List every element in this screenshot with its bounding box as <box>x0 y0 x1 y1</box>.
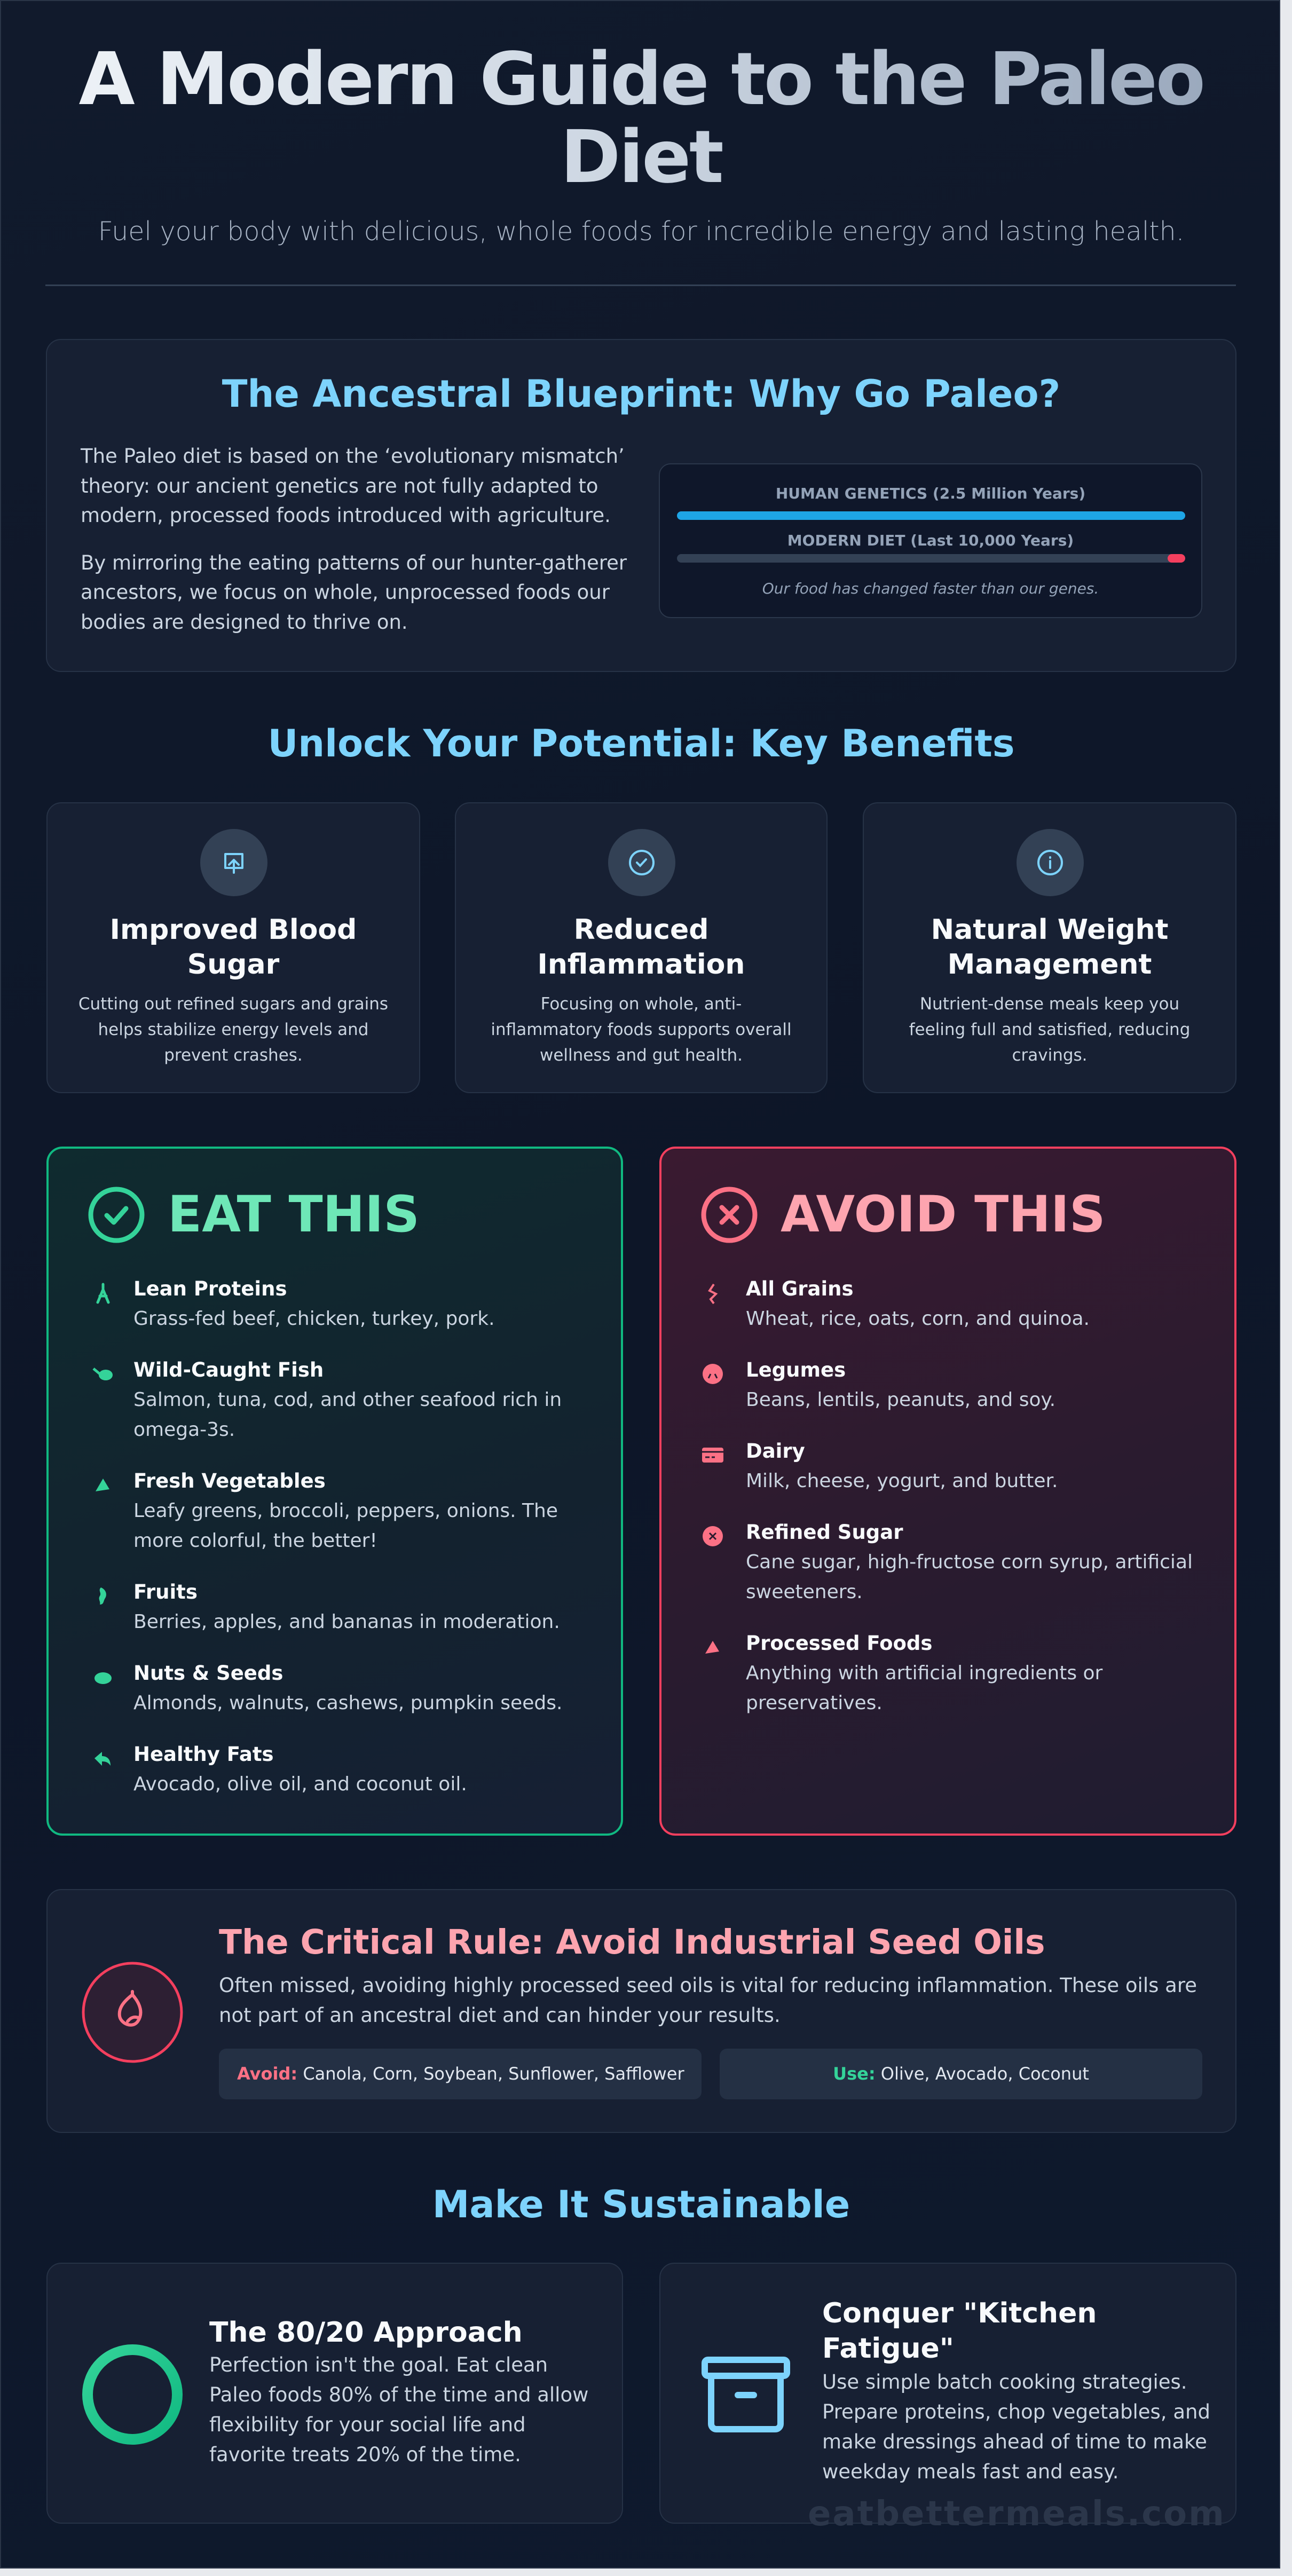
title: Diet <box>561 115 722 200</box>
chart: genetics vs diet timeline: HUMAN GENETICS (2.5 Million Years) <box>776 485 1085 502</box>
callout: use oils: Use: Olive, Avocado, Coconut <box>833 2064 1089 2084</box>
callout: avoid oils <box>219 2049 702 2099</box>
heading: seed oils: The Critical Rule: Avoid Industrial Seed Oils <box>219 1923 1045 1962</box>
text block: 80/20: Paleo foods 80% of the time and allow <box>209 2383 588 2406</box>
item: sugar <box>746 1521 1193 1603</box>
text block: mismatch theory: The Paleo diet is based on the ‘evolutionary mismatch’ <box>81 445 625 468</box>
text block: mismatch theory: theory: our ancient genetics are not fully adapted to <box>81 474 598 497</box>
text block: kitchen fatigue: weekday meals fast and easy. <box>822 2460 1119 2483</box>
panel: benefit weight: Nutrient-dense meals keep you <box>920 994 1179 1014</box>
item: processed: Processed Foods <box>746 1632 932 1655</box>
text block: mismatch theory: bodies are designed to thrive on. <box>81 611 408 633</box>
panel: benefit blood sugar: prevent crashes. <box>164 1046 303 1065</box>
item: lean proteins: Lean Proteins <box>133 1277 287 1300</box>
panel: benefit blood sugar: Cutting out refined sugars and grains <box>78 994 388 1014</box>
item: processed: Anything with artificial ingredients or <box>746 1662 1102 1684</box>
item: nuts: Almonds, walnuts, cashews, pumpkin seeds. <box>133 1692 562 1714</box>
text block: kitchen fatigue: Conquer "Kitchen <box>822 2297 1097 2329</box>
text block: 80/20: Perfection isn't the goal. Eat clean <box>209 2353 548 2376</box>
item: processed <box>746 1632 1103 1714</box>
heading: eat this: EAT THIS <box>168 1186 420 1244</box>
item: fruits: Berries, apples, and bananas in moderation. <box>133 1611 560 1633</box>
item: vegetables <box>133 1469 558 1552</box>
panel: benefit inflammation: Focusing on whole, anti- <box>541 994 742 1014</box>
item: fish <box>133 1358 562 1441</box>
item: vegetables: Leafy greens, broccoli, peppers, onions. The <box>133 1500 558 1522</box>
panel: benefit blood sugar <box>46 802 420 1093</box>
watermark: eatbettermeals.com <box>808 2494 1226 2534</box>
icon: check <box>608 829 675 896</box>
text block: kitchen fatigue: Fatigue" <box>822 2333 954 2365</box>
text block: kitchen fatigue: Prepare proteins, chop vegetables, and <box>822 2400 1210 2423</box>
heading: sustainable: Make It Sustainable <box>432 2183 850 2226</box>
text block: seed oils: not part of an ancestral diet and can hinder your results. <box>219 2004 781 2027</box>
item: lean proteins <box>133 1277 495 1330</box>
item: fish: Salmon, tuna, cod, and other seafood rich in <box>133 1389 562 1411</box>
text block: mismatch theory: modern, processed foods introduced with agriculture. <box>81 504 611 527</box>
icons: avoid list <box>702 1283 723 1654</box>
item: nuts: Nuts & Seeds <box>133 1662 283 1685</box>
panel: benefit inflammation <box>455 802 828 1093</box>
text block: seed oils <box>219 1974 1197 2027</box>
text block: mismatch theory: ancestors, we focus on whole, unprocessed foods our <box>81 581 610 604</box>
text block: 80/20 <box>209 2317 588 2466</box>
chart: genetics vs diet timeline: MODERN DIET (Last 10,000 Years) <box>787 532 1074 549</box>
title: A Modern Guide to the Paleo <box>79 37 1203 122</box>
title <box>1 41 1281 196</box>
heading: blueprint: The Ancestral Blueprint: Why Go Paleo? <box>222 372 1060 416</box>
item: vegetables: more colorful, the better! <box>133 1530 377 1552</box>
icon: info <box>1017 829 1084 896</box>
text block: mismatch theory: By mirroring the eating patterns of our hunter-gatherer <box>81 551 627 574</box>
icon: check circle <box>89 1187 144 1243</box>
panel: benefit blood sugar: Improved Blood <box>110 914 357 946</box>
item: dairy <box>746 1440 1058 1492</box>
callout: use oils <box>720 2049 1202 2099</box>
text block: 80/20: The 80/20 Approach <box>209 2317 523 2349</box>
icon: x circle <box>702 1187 757 1243</box>
text block: kitchen fatigue: Use simple batch cooking strategies. <box>822 2370 1187 2393</box>
chart: genetics vs diet timeline <box>659 463 1202 618</box>
text block: mismatch theory <box>80 445 627 633</box>
panel: 80/20 <box>46 2263 623 2524</box>
item: fruits <box>133 1581 560 1633</box>
item: lean proteins: Grass-fed beef, chicken, turkey, pork. <box>133 1308 495 1330</box>
panel: benefit weight <box>863 802 1236 1093</box>
item: fish: omega-3s. <box>133 1419 235 1441</box>
panel: benefit weight: feeling full and satisfied, reducing <box>909 1020 1190 1039</box>
text block: seed oils: Often missed, avoiding highly processed seed oils is vital for reducing inflammation. These oils are <box>219 1974 1197 1997</box>
panel: benefit inflammation: Reduced <box>574 914 708 946</box>
panel: benefit inflammation: inflammatory foods supports overall <box>491 1020 792 1039</box>
item: fats: Avocado, olive oil, and coconut oil. <box>133 1773 467 1795</box>
panel: benefit inflammation: wellness and gut health. <box>540 1046 743 1065</box>
heading: avoid this: AVOID THIS <box>781 1186 1106 1244</box>
bar: modern diet <box>677 554 1185 563</box>
subtitle: Fuel your body with delicious, whole foods for incredible energy and lasting health. <box>98 216 1184 247</box>
item: fats: Healthy Fats <box>133 1743 274 1766</box>
icon: seed oil <box>82 1962 183 2063</box>
panel: avoid this <box>659 1147 1236 1836</box>
panel: benefit inflammation: Inflammation <box>538 949 745 981</box>
item: sugar: Cane sugar, high-fructose corn syrup, artificial <box>746 1551 1193 1573</box>
icons: eat list <box>93 1283 113 1766</box>
item: fats <box>133 1743 467 1795</box>
panel: benefit weight: Natural Weight <box>931 914 1168 946</box>
panel: benefit blood sugar: Sugar <box>187 949 279 981</box>
heading: key benefits: Unlock Your Potential: Key Benefits <box>267 722 1015 765</box>
item: dairy: Dairy <box>746 1440 805 1463</box>
item: grains: Wheat, rice, oats, corn, and quinoa. <box>746 1308 1090 1330</box>
panel: seed oils <box>46 1889 1236 2133</box>
item: grains: All Grains <box>746 1277 854 1300</box>
item: legumes <box>746 1358 1055 1411</box>
icon: ring <box>82 2344 183 2445</box>
panel: ancestral blueprint <box>46 339 1236 672</box>
item: legumes: Legumes <box>746 1358 846 1381</box>
panel: benefit weight: Management <box>948 949 1152 981</box>
item: grains <box>746 1277 1090 1330</box>
text block: kitchen fatigue <box>822 2297 1210 2483</box>
item: legumes: Beans, lentils, peanuts, and soy. <box>746 1389 1055 1411</box>
item: vegetables: Fresh Vegetables <box>133 1469 326 1492</box>
text block: 80/20: flexibility for your social life and <box>209 2413 526 2436</box>
item: processed: preservatives. <box>746 1692 883 1714</box>
item: dairy: Milk, cheese, yogurt, and butter. <box>746 1470 1058 1492</box>
item: sugar: sweeteners. <box>746 1581 863 1603</box>
item: fruits: Fruits <box>133 1581 198 1603</box>
item: fish: Wild-Caught Fish <box>133 1358 324 1381</box>
item: sugar: Refined Sugar <box>746 1521 903 1544</box>
chart: genetics vs diet timeline: Our food has changed faster than our genes. <box>762 580 1099 597</box>
panel: benefit weight: cravings. <box>1012 1046 1088 1065</box>
icon: chart <box>200 829 267 896</box>
panel: kitchen fatigue <box>659 2263 1236 2524</box>
item: nuts <box>133 1662 562 1714</box>
bar: genetics <box>677 511 1185 520</box>
icon: container <box>702 2357 790 2432</box>
text block: 80/20: favorite treats 20% of the time. <box>209 2443 521 2466</box>
panel: eat this <box>46 1147 623 1836</box>
callout: avoid oils: Avoid: Canola, Corn, Soybean, Sunflower, Safflower <box>237 2064 684 2084</box>
text block: kitchen fatigue: make dressings ahead of time to make <box>822 2430 1207 2453</box>
panel: benefit blood sugar: helps stabilize energy levels and <box>98 1020 368 1039</box>
